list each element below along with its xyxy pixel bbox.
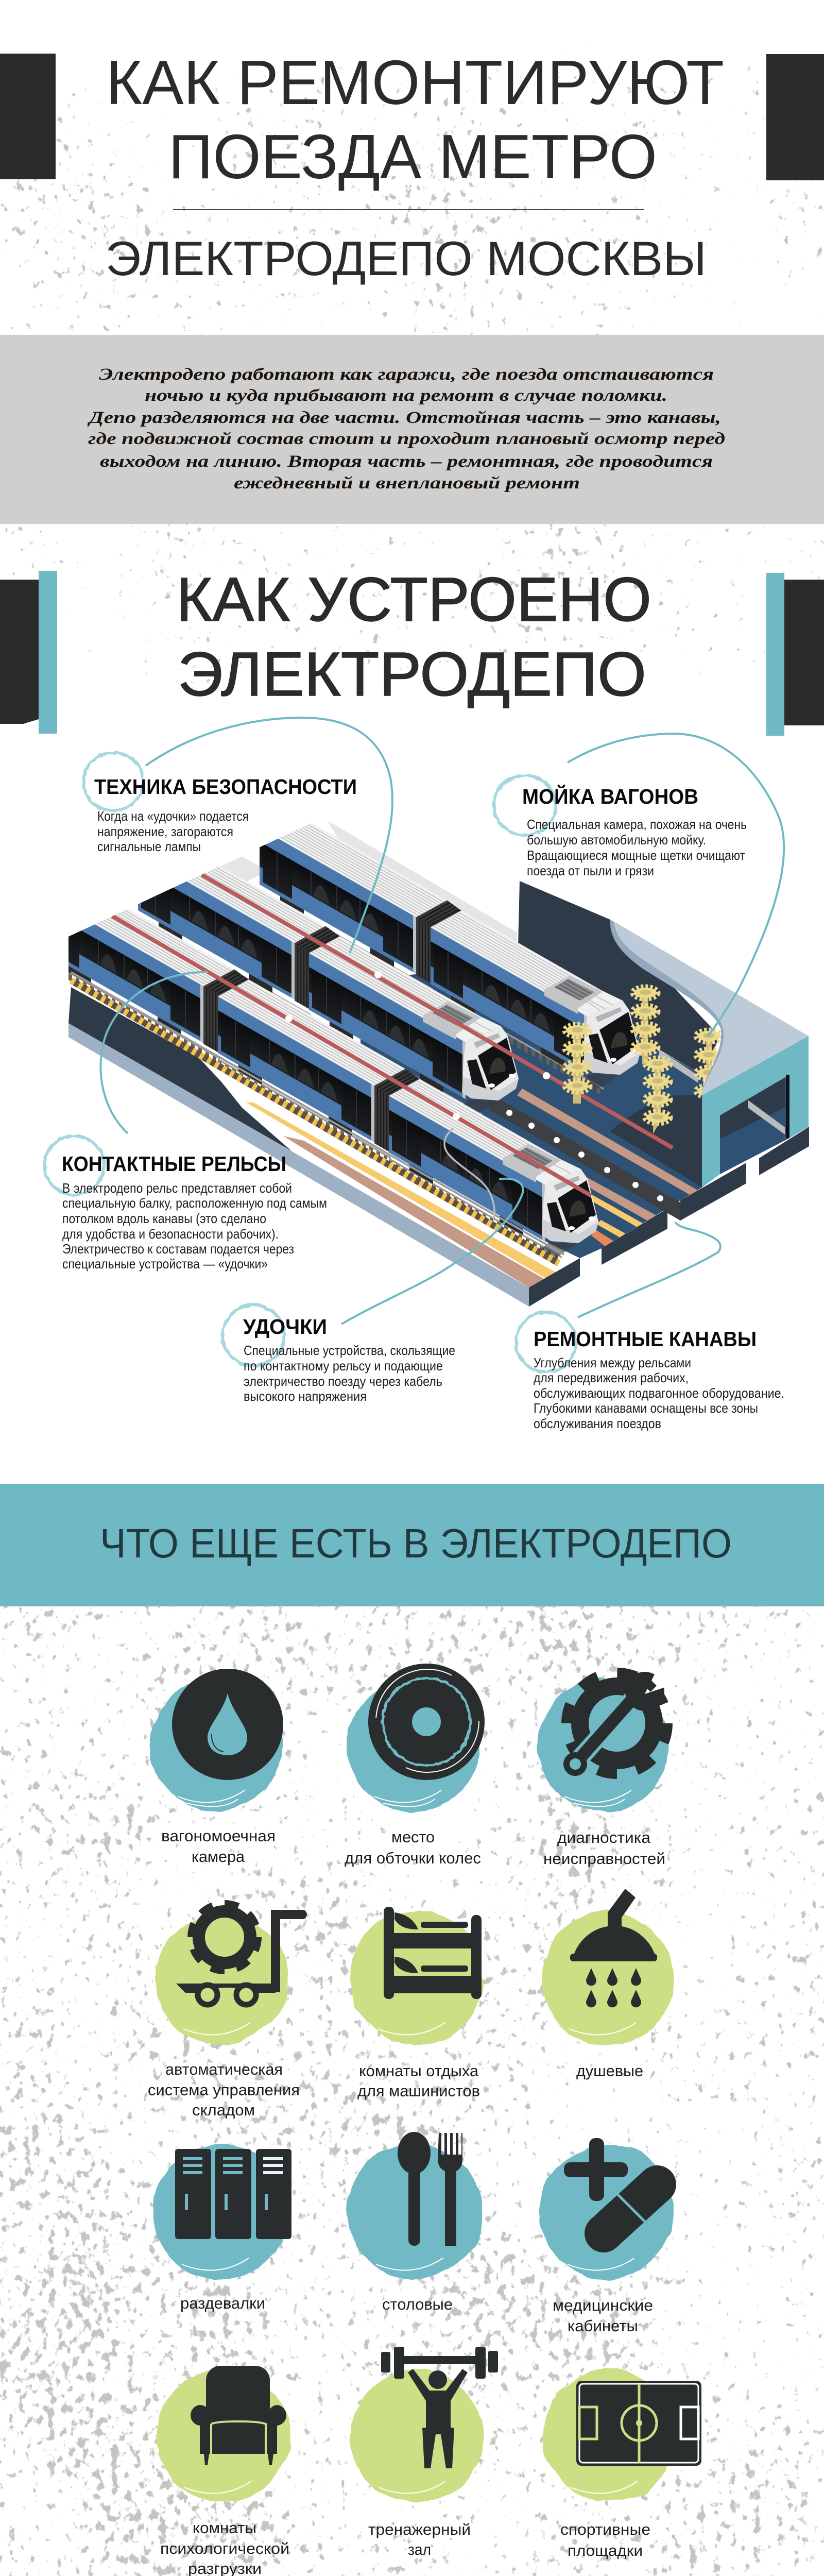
icon: lockers [175, 2149, 291, 2239]
trains [47, 793, 673, 1269]
panel: intro: где подвижной состав стоит и проходит плановый осмотр перед [88, 430, 725, 448]
callout text: для передвижения рабочих, [534, 1370, 689, 1385]
callout text: для удобства и безопасности рабочих). [62, 1226, 279, 1242]
callout text: сигнальные лампы [97, 839, 201, 854]
label: автоматическая [165, 2060, 283, 2078]
label [543, 1828, 665, 1868]
callout heading: УДОЧКИ [243, 1315, 327, 1338]
facility: canteens [347, 2132, 482, 2313]
callout text: Углубления между рельсами [534, 1355, 691, 1370]
callout: contact rails [44, 972, 327, 1272]
callout text: специальную балку, расположенную под самым [62, 1195, 327, 1211]
panel: intro: выходом на линию. Вторая часть – ремонтная, где проводится [100, 452, 713, 471]
label: столовые [382, 2295, 453, 2313]
callout text: обслуживания поездов [534, 1416, 661, 1431]
right black block [766, 54, 824, 180]
callout text: специальные устройства — «удочки» [62, 1256, 268, 1272]
callout text: высокого напряжения [244, 1388, 367, 1404]
front track [71, 972, 564, 1263]
label: комнаты [193, 2519, 256, 2537]
label [345, 1828, 481, 1867]
callout text: электричество поезду через кабель [244, 1374, 442, 1389]
callout leader [578, 1222, 720, 1317]
callout ring [494, 775, 556, 835]
label [160, 2519, 289, 2576]
callout text [97, 808, 249, 854]
callout text [534, 1355, 784, 1431]
label: комнаты отдыха [359, 2062, 479, 2080]
icon: spoon and fork [398, 2132, 462, 2246]
callout text: по контактному рельсу и подающие [244, 1358, 443, 1374]
title [106, 47, 724, 192]
facility: psychological relief rooms [157, 2366, 289, 2576]
panel: intro [0, 335, 824, 524]
panel: intro: Депо разделяются на две части. Отстойная часть – это канавы, [87, 409, 721, 427]
heading: how the depot works [176, 564, 651, 709]
callout text: потолком вдоль канавы (это сделано [62, 1211, 266, 1226]
wash brushes [564, 987, 722, 1134]
label: медицинские [553, 2296, 653, 2314]
label: кабинеты [568, 2317, 638, 2335]
section header right tab [766, 573, 824, 736]
panel: intro: ежедневный и внеплановый ремонт [234, 474, 580, 493]
callout text: поезда от пыли и грязи [527, 863, 654, 878]
label [357, 2062, 480, 2100]
banner: what else [0, 1484, 824, 1606]
label: система управления [148, 2081, 300, 2099]
callout text: напряжение, загораются [97, 824, 233, 839]
facility: gym [351, 2347, 498, 2558]
title: КАК РЕМОНТИРУЮТ [106, 47, 724, 117]
callout: wash [494, 734, 784, 1036]
label [161, 1827, 276, 1866]
label: тренажерный [368, 2520, 471, 2538]
label: для обточки колес [345, 1849, 481, 1867]
label: для машинистов [357, 2082, 480, 2100]
icon: bunk bed [384, 1907, 482, 1999]
callout text [527, 817, 747, 878]
callout: safety [83, 718, 392, 953]
callout: repair pits [516, 1222, 784, 1431]
callout text: большую автомобильную мойку. [527, 832, 706, 848]
callout text: Глубокими канавами оснащены все зоны [534, 1400, 758, 1416]
icon: shower [570, 1889, 657, 2007]
callout text: Когда на «удочки» подается [97, 808, 249, 824]
icon: gear on cart [176, 1905, 307, 2005]
callout ring [222, 1305, 284, 1366]
facility: driver rest rooms [350, 1907, 483, 2100]
banner: what else: ЧТО ЕЩЕ ЕСТЬ В ЭЛЕКТРОДЕПО [100, 1520, 732, 1566]
heading: how the depot works: КАК УСТРОЕНО [176, 564, 651, 634]
subtitle: ЭЛЕКТРОДЕПО МОСКВЫ [106, 231, 707, 285]
callout text: В электродепо рельс представляет собой [62, 1180, 292, 1196]
label: зал [408, 2540, 431, 2558]
callout heading: МОЙКА ВАГОНОВ [522, 785, 698, 808]
label: спортивные [560, 2520, 650, 2538]
facility: sports grounds [543, 2369, 701, 2560]
panel: intro: Электродепо работают как гаражи, где поезда отстаиваются [99, 365, 714, 384]
callout text: Специальная камера, похожая на очень [527, 817, 747, 832]
label: площадки [568, 2541, 643, 2560]
label: вагономоечная [161, 1827, 276, 1845]
label: душевые [576, 2062, 643, 2080]
wash building [610, 920, 809, 1188]
callout text [62, 1180, 327, 1272]
icon: water drop [172, 1669, 283, 1780]
heading: how the depot works: ЭЛЕКТРОДЕПО [178, 639, 646, 709]
isometric depot illustration [47, 793, 809, 1307]
facility: diagnostics [537, 1665, 676, 1868]
facility: showers [541, 1889, 674, 2080]
label: раздевалки [180, 2294, 265, 2312]
callout leader [568, 734, 784, 1036]
label: складом [192, 2101, 255, 2119]
callout leader [100, 972, 208, 1133]
callout text [244, 1343, 455, 1404]
facility: wheel turning [345, 1664, 485, 1867]
cable [444, 1128, 494, 1218]
icon: football field [576, 2381, 701, 2466]
facility: changing rooms [153, 2144, 291, 2312]
callout ring [44, 1136, 104, 1195]
callout ring [516, 1312, 576, 1372]
left black block [0, 54, 56, 179]
label [560, 2520, 650, 2560]
callout heading: ТЕХНИКА БЕЗОПАСНОСТИ [94, 775, 357, 799]
callout text: Вращающиеся мощные щетки очищают [527, 848, 745, 863]
label [553, 2296, 653, 2335]
callout: collectors [222, 1179, 523, 1404]
callout ring [83, 753, 143, 810]
facility: medical rooms [539, 2138, 674, 2335]
icon: medical plus and pill [564, 2138, 657, 2233]
icon: armchair [191, 2366, 286, 2465]
callout heading: КОНТАКТНЫЕ РЕЛЬСЫ [62, 1152, 286, 1176]
section header left tab [0, 571, 57, 734]
callout text: Электричество к составам подается через [62, 1241, 294, 1257]
label: диагностика [557, 1828, 651, 1846]
label [368, 2520, 471, 2558]
icon: wheel [368, 1664, 485, 1780]
label: неисправностей [543, 1850, 665, 1868]
callout text: обслуживающих подвагонное оборудование. [534, 1385, 784, 1401]
icon: weightlifter [381, 2347, 498, 2468]
label: психологической [160, 2539, 289, 2557]
title: ПОЕЗДА МЕТРО [168, 122, 657, 192]
facility: warehouse automation [148, 1905, 307, 2119]
label [148, 2060, 300, 2119]
panel: intro: ночью и куда прибывают на ремонт в случае поломки. [145, 386, 667, 405]
callout heading: РЕМОНТНЫЕ КАНАВЫ [534, 1327, 757, 1351]
icon: gear and wrench [563, 1665, 676, 1776]
facility: wash chamber [150, 1669, 283, 1866]
label: камера [192, 1848, 245, 1866]
callout text: Специальные устройства, скользящие [244, 1343, 455, 1358]
label: место [391, 1828, 435, 1846]
callout leader [341, 1179, 523, 1324]
callout leader [146, 718, 392, 953]
